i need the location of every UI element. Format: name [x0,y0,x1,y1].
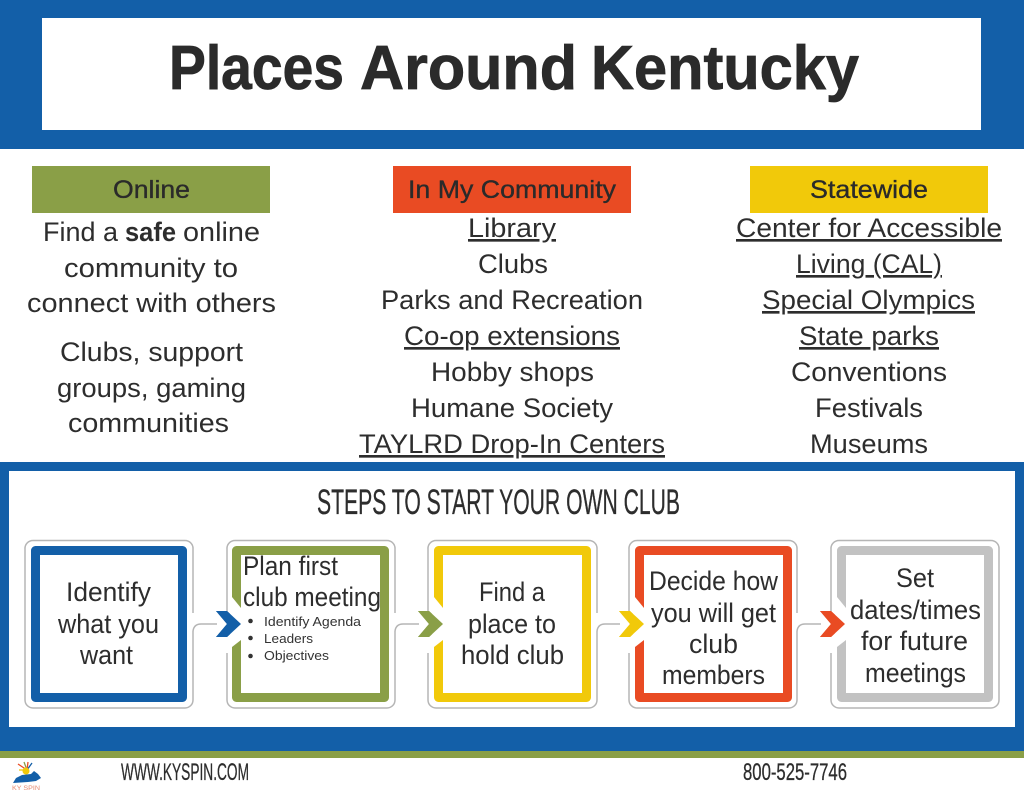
step 5: Set [896,563,935,593]
step 4: Decide how [649,566,779,596]
arrow: step 3 to step 4 [597,611,644,637]
heading: online [32,166,270,213]
step 3 [418,540,597,708]
title: Kentucky [591,34,859,103]
step 4: members [662,660,765,690]
step 2: Plan first [243,551,339,581]
list: community places: TAYLRD Drop-In Centers [359,429,665,459]
list: community places: Humane Society [411,393,614,423]
step 3: place to [468,609,556,639]
step 1: want [79,640,134,670]
heading: in my community: In My Community [408,176,617,204]
step 4: club [689,629,738,659]
arrow: step 2 to step 3 [395,611,443,637]
title banner [0,0,1024,149]
heading: statewide [750,166,988,213]
step 1: Identify [66,577,152,607]
list: statewide places: Special Olympics [762,285,975,315]
list: community places: Parks and Recreation [381,285,643,315]
step 2: Leaders [264,631,314,646]
step 1 [25,540,193,708]
icon: KY SPIN logo [12,762,41,791]
step 5: meetings [865,658,966,688]
list: statewide places: Center for Accessible [736,213,1002,243]
list: statewide places: Museums [810,429,928,459]
arrow: step 1 to step 2 [193,611,241,637]
list: statewide places: Festivals [815,393,923,423]
text block: clubs and groups: Clubs, support [60,337,244,367]
step 2: Objectives [264,648,330,663]
heading: statewide: Statewide [810,176,928,204]
panel: online [27,166,276,438]
step 3: hold club [461,640,564,670]
text block: safe online community: connect with others [27,288,276,318]
step 5 [820,540,999,708]
step 5: for future [861,626,968,656]
title [169,34,859,103]
list: community places: Hobby shops [431,357,594,387]
text block: clubs and groups: communities [68,408,229,438]
step 2 [216,540,395,708]
text block: safe online community: Find a [43,217,118,247]
list: statewide places: State parks [799,321,939,351]
panel: statewide [736,166,1002,459]
footer phone: 800-525-7746 [743,759,847,786]
title: Places [169,34,344,103]
heading: steps: STEPS TO START YOUR OWN CLUB [317,483,680,522]
step 4: you will get [651,598,777,628]
step 1: what you [57,609,159,639]
text block: clubs and groups: groups, gaming [57,373,246,403]
arrow: step 4 to step 5 [797,611,845,637]
text block: safe online community: online [183,217,260,247]
list: community places: Co-op extensions [404,321,620,351]
step 4 [619,540,797,708]
step 2: Identify Agenda [264,614,362,629]
panel: steps to start your own club [0,462,1024,751]
step 3: Find a [479,577,545,607]
heading: online: Online [113,176,190,204]
footer website: WWW.KYSPIN.COM [121,759,249,786]
title: Around [360,34,577,103]
heading: in my community [393,166,631,213]
text block: safe online community [27,217,276,318]
text block: safe online community: safe [125,217,176,247]
panel: in my community [359,166,665,459]
list: community places: Clubs [478,249,548,279]
list: statewide places: Living (CAL) [796,249,942,279]
footer stripe [0,751,1024,758]
list: statewide places [736,213,1002,459]
list: statewide places: Conventions [791,357,947,387]
list: community places: Library [468,213,557,243]
step 5: dates/times [850,595,981,625]
text block: clubs and groups [57,337,246,438]
list: community places [359,213,665,459]
step 2: club meeting [243,582,381,612]
text block: safe online community: community to [64,253,238,283]
